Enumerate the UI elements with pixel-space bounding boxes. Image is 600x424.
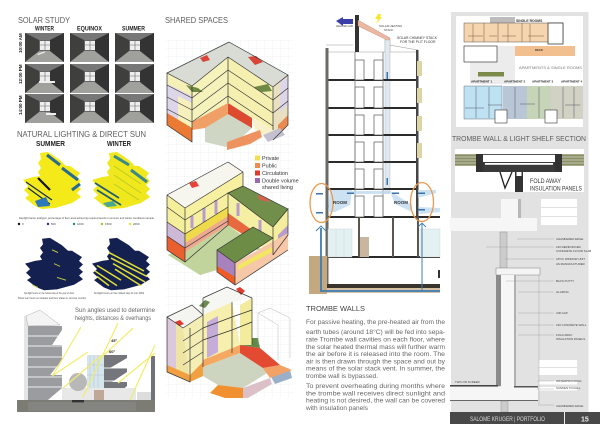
text: trombe walls description: trombe wall is bypassed. — [306, 373, 378, 380]
heat map legend: 2000 — [133, 222, 140, 226]
roof chimney stack — [355, 15, 390, 193]
solar chimney label — [397, 36, 438, 44]
blue warm air glow — [328, 190, 440, 214]
solar study column labels — [35, 26, 146, 32]
text: trombe walls description: the solar heated thermal mass will further warm — [306, 344, 445, 351]
section detail notes: INSULATION PANELS — [556, 337, 585, 341]
legend: shared spaces: Public — [262, 164, 277, 170]
text: trombe walls description: air is then drawn through the space and out by — [306, 358, 446, 366]
legend: shared spaces — [255, 156, 299, 191]
solar study column labels: WINTER — [35, 26, 55, 32]
diagram: sun angle section — [17, 310, 155, 412]
diagram: sun angle section: 45° — [111, 338, 117, 343]
solar study time labels — [18, 33, 23, 115]
text: sun angle note — [75, 308, 156, 322]
solar study render grid — [25, 33, 154, 123]
footer bar — [450, 412, 600, 424]
heading: natural lighting: NATURAL LIGHTING & DIRECT SUN — [17, 130, 146, 139]
heading: solar study: SOLAR STUDY — [18, 16, 71, 25]
solar label: SOLAR HEATING — [379, 24, 403, 28]
text: trombe walls description: rate Trombe wall cavities on each floor, where — [306, 336, 445, 344]
solar study time labels: 12:00 PM — [18, 64, 23, 84]
heading: shared spaces: SHARED SPACES — [165, 16, 228, 25]
section detail notes: AIR GAP — [556, 311, 568, 315]
section detail notes: CONCRETE FLOOR SLAB — [556, 249, 591, 253]
direct sun captions: Sunlight hours on the coldest day 21 Jun 2019 — [94, 291, 144, 295]
panel: apartment floor plans: SINGLE ROOMS — [516, 19, 543, 23]
solar study time labels: 10:00 AM — [18, 33, 23, 53]
solar study time labels: 14:00 PM — [18, 95, 23, 115]
text: trombe walls description: earth tubes (around 18°C) will be fed into sepa- — [306, 328, 445, 336]
sun icon — [375, 14, 382, 24]
diagram: wall section detail — [450, 199, 591, 412]
section detail notes: 230 CONCRETE WALL — [556, 323, 587, 327]
panel: trombe wall plan detail — [455, 149, 584, 192]
solar chimney label: SOLAR CHIMNEY STACK — [397, 36, 438, 40]
earth tube air path — [316, 223, 440, 291]
text: trombe walls description: heating is not desired, the wall can be covered — [306, 398, 445, 404]
chart: winter daylight heat map — [92, 152, 150, 209]
heat map caption: Daylight factor analysis: percentage of floor area achieving required levels in summer and winter conditions sample — [19, 216, 154, 220]
legend: shared spaces: Private — [262, 156, 279, 162]
basement slab and earth — [309, 256, 440, 294]
label: winter: WINTER — [107, 139, 131, 148]
diagram: level massing sketch 1 — [167, 42, 288, 150]
diagram: sun angle section: 60° — [109, 349, 115, 354]
ground floor glazing — [328, 217, 440, 257]
section detail notes: CHAMFERED EDGE — [556, 404, 583, 408]
section detail notes: WATERPROOFING — [556, 379, 582, 383]
text: trombe walls description: To prevent overheating during months where — [306, 383, 445, 390]
panel: apartment floor plans: APARTMENTS & SINGLE ROOMS — [519, 66, 583, 70]
section detail notes: CHAMFERED EDGE — [556, 237, 583, 241]
legend: shared spaces: Double volume — [262, 178, 299, 184]
text: sun angle note: heights, distances & overhangs — [75, 316, 151, 322]
chart: summer direct sun map — [25, 238, 83, 290]
section detail notes — [455, 237, 591, 408]
text: trombe walls description: the air before it is released into the room. The — [306, 351, 445, 358]
exhaust arrow: HEATED AIR — [336, 24, 353, 28]
direct sun captions: Direct sun hours on facades and floor plates in summer months — [18, 296, 86, 300]
solar chimney label: FOR THE PLIT FLOOR — [400, 40, 436, 44]
room labels: ROOM — [333, 200, 347, 205]
room labels — [333, 200, 408, 205]
diagram: level massing sketch 2 — [167, 162, 288, 285]
section detail notes: TWO OR SCREED — [455, 380, 480, 384]
diagram: level massing sketch 3 — [167, 287, 292, 398]
solar label: STACK — [384, 28, 393, 32]
solar label — [379, 24, 403, 32]
panel: apartment floor plans: APARTMENT 2 — [504, 80, 525, 84]
section detail notes: 160 REINFORCED — [556, 245, 581, 249]
heat map legend: 0 — [22, 222, 24, 226]
heat map legend — [18, 222, 140, 226]
panel: apartment floor plans: DECK — [535, 48, 543, 52]
chart: winter direct sun map — [92, 238, 150, 290]
blue arrows — [316, 72, 425, 214]
heading: trombe walls: TROMBE WALLS — [306, 304, 365, 313]
footer bar: 15 — [581, 416, 589, 424]
section detail notes: AS MANUFACTURED — [556, 262, 585, 266]
sketch grid paper — [166, 40, 294, 398]
solar study column labels: SUMMER — [122, 26, 146, 32]
section detail notes: GLAZING — [556, 290, 569, 294]
direct sun captions — [18, 291, 144, 300]
panel: apartment floor plans: APARTMENT 4 — [561, 80, 582, 84]
direct sun captions: Sunlight hours on the hottest day of the year 21 Dec — [24, 291, 74, 295]
panel: apartment floor plans: APARTMENT 1 — [471, 80, 492, 84]
heat map legend: 1500 — [105, 222, 112, 226]
text: sun angle note: Sun angles used to determine — [75, 308, 156, 314]
panel: trombe wall plan detail: FOLD AWAY — [530, 179, 561, 185]
text: trombe walls description: For passive heating, the pre-heated air from the — [306, 319, 445, 326]
panel: trombe wall plan detail: INSULATION PANELS — [530, 186, 582, 192]
text: trombe walls description: with insulation panels — [305, 405, 369, 412]
legend: shared spaces: shared living — [262, 185, 293, 191]
text: trombe walls description: means of the solar stack vent. In summer, the — [306, 366, 445, 372]
orange trombe callout ellipses — [310, 182, 434, 222]
service core units — [355, 60, 383, 217]
chart: summer daylight heat map — [23, 152, 81, 209]
text: trombe walls description: the trombe wall receives direct sunlight and — [306, 390, 445, 398]
heat map legend: 1000 — [77, 222, 84, 226]
solar study column labels: EQUINOX — [77, 26, 102, 32]
label: summer: SUMMER — [36, 139, 65, 148]
room labels: ROOM — [394, 200, 408, 205]
panel: apartment floor plans: APARTMENT 3 — [532, 80, 553, 84]
panel: apartment floor plans — [456, 16, 583, 127]
section detail notes: SUNKEN TO FALL — [556, 386, 581, 390]
exhaust arrow — [336, 17, 353, 28]
section detail notes: FOLD AWAY — [556, 333, 573, 337]
heading: trombe wall and light shelf section: TROMBE WALL & LIGHT SHELF SECTION — [452, 134, 586, 143]
text: trombe walls description — [305, 319, 446, 412]
legend: shared spaces: Circulation — [262, 171, 288, 177]
section detail notes: BACK PUTTY — [556, 279, 574, 283]
panel: right grey column — [451, 12, 588, 412]
section detail notes: UPVC WINDOW UNIT — [556, 257, 585, 261]
heat map legend: 500 — [51, 222, 56, 226]
footer bar: SALOME KRUGER | PORTFOLIO — [470, 417, 545, 423]
diagram: trombe building section — [309, 14, 440, 294]
